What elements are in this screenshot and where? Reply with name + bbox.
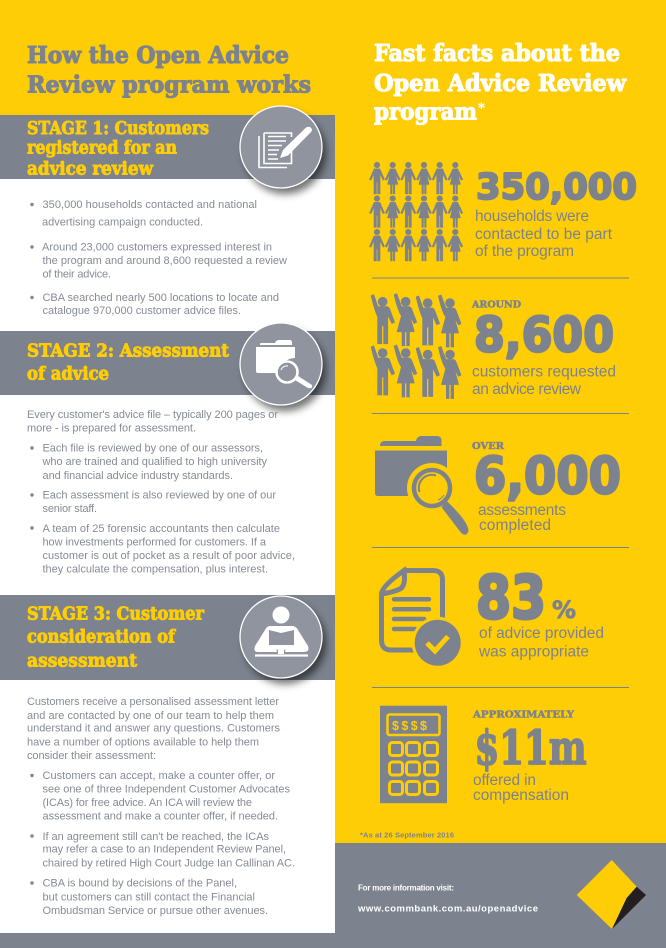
percent sign: % xyxy=(552,596,576,624)
stage 3 text: chaired by retired High Court Judge Ian Callinan AC. xyxy=(42,858,295,870)
stage 3 text: Customers can accept, make a counter offer, or xyxy=(42,770,275,782)
caption: customers requested xyxy=(472,364,616,381)
caption: of the program xyxy=(475,243,574,260)
number: 350,000 xyxy=(476,167,637,208)
fact: $11m compensation xyxy=(380,706,586,804)
panel: white stages column xyxy=(0,115,335,933)
stage 1 text: Around 23,000 customers expressed interest in xyxy=(42,242,272,254)
fact: 350,000 households xyxy=(369,162,637,261)
main title: Review program works xyxy=(27,72,311,98)
footnote: *As at 26 September 2016 xyxy=(360,831,454,840)
stage 2 heading: STAGE 2: Assessment xyxy=(27,341,229,361)
stage 1 text: the program and around 8,600 requested a review xyxy=(42,255,287,267)
number: $11m xyxy=(474,721,586,776)
panel: stage 2 xyxy=(0,323,335,576)
divider xyxy=(372,547,629,548)
stage 1 text xyxy=(30,199,287,317)
stage 1 heading: advice review xyxy=(27,160,154,180)
footer contact text: For more information visit: xyxy=(358,884,454,893)
fact: 8,600 customers xyxy=(371,294,616,398)
stage 3 heading: STAGE 3: Customer xyxy=(27,605,205,625)
stage 2 text: more - is prepared for assessment. xyxy=(27,423,196,435)
icon: crowd of people xyxy=(369,162,463,261)
stage 3 text: (ICAs) for free advice. An ICA will review the xyxy=(42,797,252,809)
divider xyxy=(372,413,629,414)
icon: folder and magnifier xyxy=(240,323,326,411)
stage 3 text: If an agreement still can't be reached, the ICAs xyxy=(42,831,270,843)
right title xyxy=(374,40,627,126)
right title: Open Advice Review xyxy=(374,70,627,97)
label: APPROXIMATELY xyxy=(472,709,574,720)
stage 2 text: Each assessment is also reviewed by one of our xyxy=(42,490,276,502)
stage 1 heading: registered for an xyxy=(27,139,177,159)
icon: people with raised hands xyxy=(371,294,461,398)
number: 6,000 xyxy=(474,448,621,507)
caption: completed xyxy=(479,517,551,534)
label: OVER xyxy=(472,441,504,452)
stage 1 header bar xyxy=(0,115,335,179)
main title: How the Open Advice xyxy=(27,42,289,69)
number: 83 xyxy=(476,563,546,633)
stage 1 heading xyxy=(27,119,209,180)
stage 2 text: Every customer's advice file – typically 200 pages or xyxy=(27,409,278,421)
stage 3 text: see one of three Independent Customer Advocates xyxy=(42,784,290,796)
right title: Fast facts about the xyxy=(374,40,620,67)
caption xyxy=(478,625,604,661)
divider xyxy=(372,278,629,279)
caption: compensation xyxy=(473,787,569,804)
caption xyxy=(472,364,616,398)
main title xyxy=(27,42,311,98)
stage 2 text: A team of 25 forensic accountants then calculate xyxy=(42,523,280,535)
stage 2 text xyxy=(27,409,295,576)
stage 3 text: may refer a case to an Independent Review Panel, xyxy=(42,844,286,856)
caption: of advice provided xyxy=(479,625,604,642)
caption xyxy=(475,208,613,260)
stage 1 text: advertising campaign conducted. xyxy=(42,216,203,228)
caption: assessments xyxy=(478,502,566,519)
stage 1 text: catalogue 970,000 customer advice files. xyxy=(42,305,241,317)
stage 3 header bar xyxy=(0,595,335,680)
stage 3 text: have a number of options available to help them xyxy=(27,737,259,749)
stage 3 text: and are contacted by one of our team to help them xyxy=(27,710,274,722)
stage 1 text: 350,000 households contacted and national xyxy=(42,199,257,211)
stage 2 text: who are trained and qualified to high university xyxy=(42,456,268,468)
stage 2 text: and financial advice industry standards. xyxy=(42,470,233,482)
icon: person reading xyxy=(240,596,326,684)
fact: 83% appropriate xyxy=(382,563,604,669)
label: AROUND xyxy=(471,300,521,311)
stage 2 heading: of advice xyxy=(27,365,109,385)
stage 3 heading: assessment xyxy=(27,652,137,672)
stage 3 text: understand it and answer any questions. Customers xyxy=(27,723,280,735)
stage 3 heading: consideration of xyxy=(27,628,176,648)
right title: program xyxy=(374,98,477,126)
caption: households were xyxy=(475,208,589,225)
stage 3 text: Customers receive a personalised assessment letter xyxy=(27,696,279,708)
stage 2 text: they calculate the compensation, plus interest. xyxy=(42,564,268,576)
icon: document with tick xyxy=(382,570,464,669)
caption: was appropriate xyxy=(478,644,589,661)
caption: an advice review xyxy=(472,381,582,398)
caption xyxy=(473,772,569,804)
footer band xyxy=(0,843,666,948)
panel: stage 3 xyxy=(0,595,335,917)
icon: calculator xyxy=(380,706,447,803)
footer contact text xyxy=(357,884,538,915)
stage 3 text: assessment and make a counter offer, if needed. xyxy=(42,810,278,822)
stage 3 text xyxy=(27,696,295,917)
panel: stage 1 xyxy=(0,106,335,317)
icon: document and pencil xyxy=(240,106,326,194)
stage 1 text: of their advice. xyxy=(42,268,111,280)
caption: offered in xyxy=(473,772,536,789)
stage 2 text: how investments performed for customers. If a xyxy=(42,537,267,549)
stage 2 text: Each file is reviewed by one of our assessors, xyxy=(42,443,263,455)
stage 2 header bar xyxy=(0,331,335,395)
stage 3 text: consider their assessment: xyxy=(27,750,156,762)
stage 1 heading: STAGE 1: Customers xyxy=(27,119,209,139)
icon: folder and magnifier xyxy=(375,436,468,534)
number: 8,600 xyxy=(474,308,614,364)
icon: calculator: $$$$ xyxy=(392,719,427,733)
divider xyxy=(372,687,629,688)
fact: 6,000 assessments xyxy=(375,436,621,534)
stage 3 heading xyxy=(27,605,205,672)
stage 1 text: CBA searched nearly 500 locations to locate and xyxy=(42,292,279,304)
stage 3 text: Ombudsman Service or pursue other avenues. xyxy=(42,905,268,917)
footer contact text: www.commbank.com.au/openadvice xyxy=(357,904,538,915)
right title: * xyxy=(478,101,485,116)
stage 2 text: customer is out of pocket as a result of poor advice, xyxy=(42,550,295,562)
stage 2 heading xyxy=(27,341,229,385)
stage 2 text: senior staff. xyxy=(42,503,97,515)
logo: yellow diamond xyxy=(577,860,646,929)
stage 3 text: but customers can still contact the Financial xyxy=(42,892,255,904)
caption xyxy=(478,502,566,534)
caption: contacted to be part xyxy=(475,226,613,243)
stage 3 text: CBA is bound by decisions of the Panel, xyxy=(42,878,237,890)
